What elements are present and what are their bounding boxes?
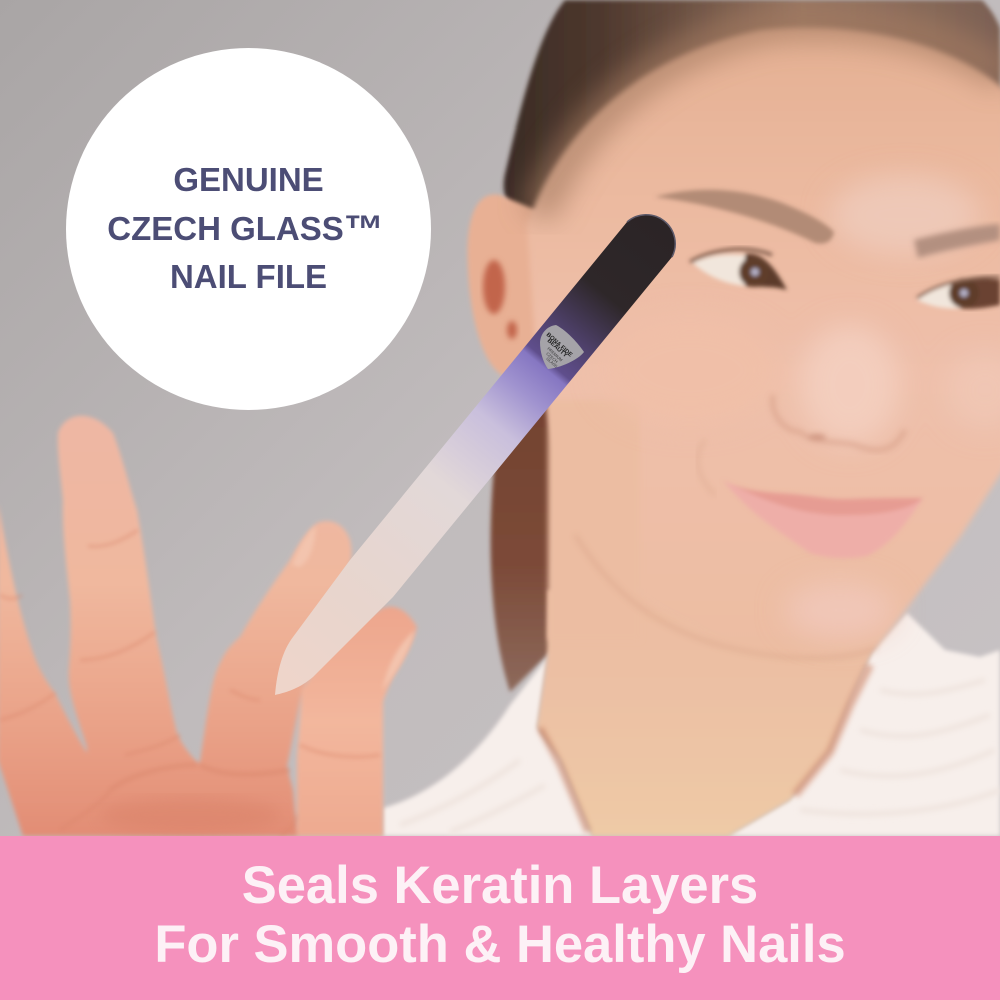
callout text: NAIL FILE <box>170 258 327 295</box>
file label shield: BEAUTY <box>546 338 568 359</box>
sweater <box>383 613 1000 836</box>
callout text <box>107 161 384 295</box>
file label shield: PREMIUM <box>546 346 564 362</box>
right eye <box>917 277 1000 309</box>
file label shield: GLASS <box>545 356 559 369</box>
banner heading: For Smooth & Healthy Nails <box>154 915 846 974</box>
face highlights <box>600 175 1000 638</box>
left eyebrow <box>655 190 834 244</box>
hand creases <box>0 530 380 836</box>
thumb <box>297 607 417 836</box>
right eyebrow <box>914 224 1000 258</box>
smile line <box>698 440 715 495</box>
file label shield <box>540 325 584 369</box>
upper hair <box>504 0 1000 216</box>
jaw line <box>575 535 877 658</box>
fingers and palm <box>0 416 352 836</box>
file label shield: BONA FIDE <box>545 332 573 358</box>
glass nail file <box>275 215 675 695</box>
pink banner <box>0 836 1000 1000</box>
hand <box>0 416 417 836</box>
callout text: CZECH GLASS™ <box>107 208 384 252</box>
face <box>527 28 1000 656</box>
inner ear <box>483 260 517 339</box>
palm shadow <box>100 797 280 833</box>
neck <box>537 590 890 836</box>
ear <box>467 194 548 378</box>
hairline shadow <box>538 22 1000 215</box>
sweater ribs <box>400 680 1000 832</box>
lower hair <box>491 370 556 692</box>
neck shadows <box>540 665 870 832</box>
banner heading <box>154 856 846 974</box>
left eye <box>690 249 787 290</box>
lips <box>723 480 923 558</box>
nose base <box>772 395 905 450</box>
callout circle <box>66 48 431 410</box>
file label shield: CZECH <box>545 351 559 364</box>
left face edge filler <box>548 400 640 640</box>
banner heading: Seals Keratin Layers <box>242 856 758 915</box>
callout text: GENUINE <box>173 161 324 198</box>
fingernails <box>292 526 415 690</box>
